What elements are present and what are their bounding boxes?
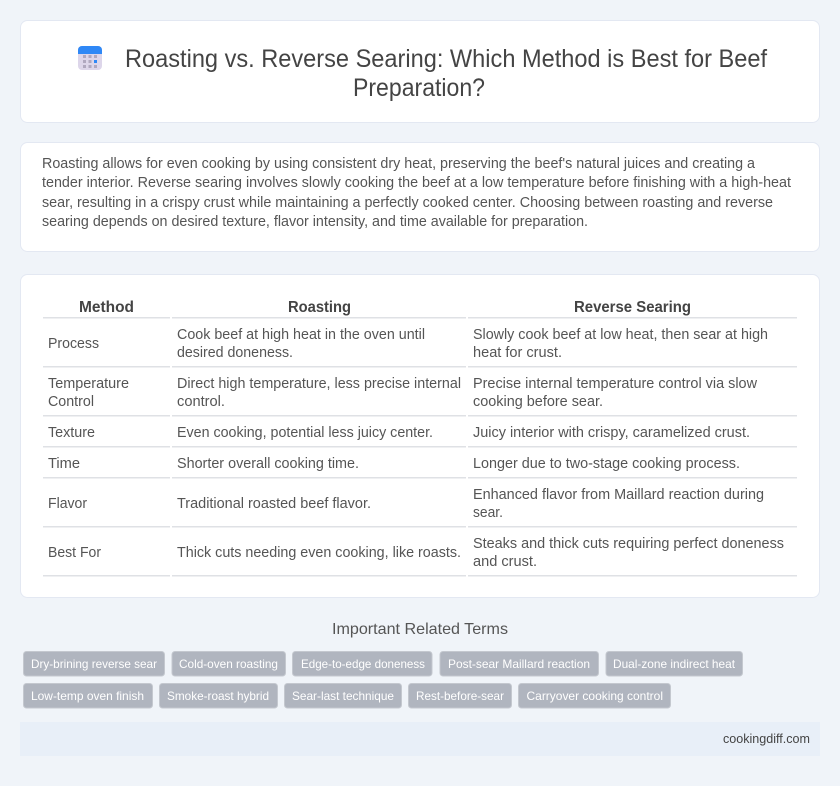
title: Roasting vs. Reverse Searing: Which Method is Best for Beef	[125, 45, 767, 73]
row: process	[48, 327, 768, 361]
related term chips: Rest-before-sear	[416, 689, 504, 703]
panel: intro paragraph	[20, 142, 820, 252]
table header row: Method	[79, 299, 134, 316]
row: flavor	[48, 487, 764, 521]
row: process: Process	[48, 336, 99, 352]
icon: calendar	[78, 46, 102, 70]
row: process: heat for crust.	[473, 345, 562, 361]
related term chips: Post-sear Maillard reaction	[448, 657, 590, 671]
row: texture: Texture	[48, 425, 95, 441]
row: temperature control: cooking before sear.	[473, 394, 603, 410]
row: best for: and crust.	[473, 554, 537, 570]
related term chips: Dual-zone indirect heat	[613, 657, 736, 671]
row: temperature control: Temperature	[48, 376, 129, 392]
row: flavor: Traditional roasted beef flavor.	[177, 496, 371, 512]
related term chips: Sear-last technique	[292, 689, 394, 703]
row: temperature control: Direct high temperature, less precise internal	[177, 376, 461, 392]
footer source text: cookingdiff.com	[723, 732, 810, 746]
row: flavor: Flavor	[48, 496, 87, 512]
intro text: tender interior. Reverse searing involves slowly cooking the beef at a low temperature before finishing with a high-heat	[42, 175, 791, 191]
related term chips: Edge-to-edge doneness	[301, 657, 425, 671]
row: temperature control: Precise internal temperature control via slow	[473, 376, 758, 392]
row: time: Shorter overall cooking time.	[177, 456, 359, 472]
row: temperature control: Control	[48, 394, 94, 410]
row: temperature control	[48, 376, 758, 410]
related term chips: Dry-brining reverse sear	[31, 657, 157, 671]
intro text: searing depends on desired texture, flavor intensity, and time available for preparation.	[42, 214, 588, 230]
footer bar	[20, 722, 820, 756]
row: process: Cook beef at high heat in the oven until	[177, 327, 425, 343]
related term chips: Low-temp oven finish	[31, 689, 144, 703]
row: texture	[48, 425, 750, 441]
heading: important related terms: Important Related Terms	[332, 621, 508, 638]
panel: comparison table	[20, 274, 820, 598]
related term chips: Carryover cooking control	[526, 689, 663, 703]
row: texture: Even cooking, potential less juicy center.	[177, 425, 433, 441]
related term chips: Smoke-roast hybrid	[167, 689, 269, 703]
related term chips: Cold-oven roasting	[179, 657, 278, 671]
table header row: Reverse Searing	[574, 299, 691, 316]
row: process: desired doneness.	[177, 345, 293, 361]
row: flavor: sear.	[473, 505, 503, 521]
row: best for: Best For	[48, 545, 101, 561]
intro text: sear, resulting in a crispy crust while maintaining a perfectly cooked center. Choosing between roasting and reverse	[42, 195, 773, 211]
table header row: Roasting	[288, 299, 351, 316]
row: temperature control: control.	[177, 394, 225, 410]
row: time: Time	[48, 456, 80, 472]
table header row	[79, 299, 691, 316]
row: process: Slowly cook beef at low heat, then sear at high	[473, 327, 768, 343]
intro text	[42, 156, 791, 230]
intro text: Roasting allows for even cooking by using consistent dry heat, preserving the beef's natural juices and creating a	[42, 156, 755, 172]
row: flavor: Enhanced flavor from Maillard reaction during	[473, 487, 764, 503]
row: time	[48, 456, 740, 472]
row: best for	[48, 536, 784, 570]
title: Preparation?	[353, 74, 485, 102]
row: texture: Juicy interior with crispy, caramelized crust.	[473, 425, 750, 441]
related term chips	[24, 652, 742, 708]
row: best for: Steaks and thick cuts requiring perfect doneness	[473, 536, 784, 552]
row: time: Longer due to two-stage cooking process.	[473, 456, 740, 472]
title	[125, 45, 767, 102]
panel: title header	[20, 20, 820, 122]
row: best for: Thick cuts needing even cooking, like roasts.	[177, 545, 461, 561]
